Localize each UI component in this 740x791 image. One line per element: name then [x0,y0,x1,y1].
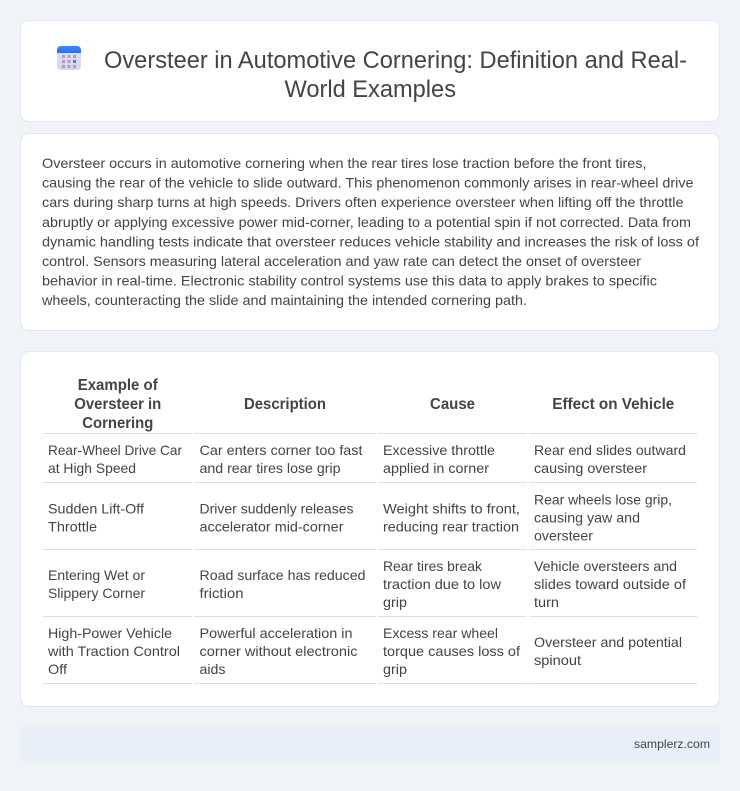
table row 4: with Traction Control [47,643,180,659]
table header row [74,377,674,432]
table row 1: Rear-Wheel Drive Car [48,442,182,458]
text block: oversteer explanation: control. Sensors measuring lateral acceleration and yaw rate can detect the onset of oversteer [42,253,641,269]
text block: oversteer explanation: behavior in real-time. Electronic stability control systems use this data to apply brakes to specific [42,273,657,289]
table row 3: turn [534,594,559,610]
column heading: example: Oversteer in [74,396,161,413]
table row 4: torque causes loss of [383,643,520,659]
table row 3: Road surface has reduced [200,567,366,583]
table row 2: accelerator mid-corner [200,518,344,534]
panel: intro description [20,134,720,330]
table row 3: grip [383,594,407,610]
table row 1: causing oversteer [534,460,647,476]
column heading: description: Description [244,396,326,413]
table row 3: traction due to low [383,576,502,592]
table row 3: Slippery Corner [48,585,145,601]
table row 1: Excessive throttle [383,442,495,458]
text block: oversteer explanation [41,155,699,308]
table row 2: Throttle [48,518,97,534]
text block: oversteer explanation: causing the rear of the vehicle to slide outward. This phenomenon commonly arises in rear-wheel drive [42,175,694,191]
table row 4: spinout [534,652,581,668]
title [104,47,687,103]
table row 4: Oversteer and potential [534,634,682,650]
column heading: effect: Effect on Vehicle [552,396,674,413]
text block: oversteer explanation: cars during sharp turns at high speeds. Drivers often experience oversteer when lifting off the throttle [42,194,684,210]
table row 3: slides toward outside of [534,576,686,592]
footer source text: samplerz.com [634,737,710,751]
table row 3: Rear tires break [383,558,483,574]
column heading: cause: Cause [430,396,475,413]
table row 4: aids [200,661,226,677]
table row 2: oversteer [534,528,593,544]
panel: examples table [20,352,720,706]
table row 2: causing yaw and [534,510,640,526]
text block: oversteer explanation: abruptly or applying excessive power mid-corner, leading to a potential spin if not corrected. Data from [42,214,691,230]
table row 1: Car enters corner too fast [200,442,363,458]
table row 2 [48,492,672,544]
table row 4: Off [48,661,67,677]
icon: calendar [57,46,81,70]
table row 1: applied in corner [383,460,489,476]
table row 3: Vehicle oversteers and [534,558,677,574]
table row 4: Powerful acceleration in [200,625,352,641]
table row 1 [48,442,686,476]
column heading: example: Example of [78,377,158,394]
panel: title card [20,20,720,122]
table row 2: Sudden Lift-Off [48,500,144,516]
title: World Examples [284,76,456,103]
table row 2: Weight shifts to front, [383,500,520,516]
table row 3 [48,558,686,610]
title: Oversteer in Automotive Cornering: Definition and Real- [104,47,687,74]
table row 2: reducing rear traction [383,518,519,534]
table row 1: Rear end slides outward [534,442,686,458]
table row 3: friction [200,585,244,601]
column heading: example [74,377,161,432]
table row 1: at High Speed [48,460,136,476]
table row 4: corner without electronic [200,643,358,659]
table row 4: Excess rear wheel [383,625,498,641]
table row 3: Entering Wet or [48,567,145,583]
text block: oversteer explanation: dynamic handling tests indicate that oversteer reduces vehicle stability and increases the risk of loss of [42,233,699,249]
table row 1: and rear tires lose grip [200,460,341,476]
text block: oversteer explanation: Oversteer occurs in automotive cornering when the rear tires lose traction before the front tires, [42,155,646,171]
table row 4: grip [383,661,407,677]
table row 2: Rear wheels lose grip, [534,492,672,508]
table row 2: Driver suddenly releases [200,500,354,516]
table row 4 [47,625,682,677]
text block: oversteer explanation: wheels, counteracting the slide and maintaining the intended cornering path. [41,292,527,308]
table row 4: High-Power Vehicle [48,625,172,641]
footer bar [20,727,720,761]
column heading: example: Cornering [82,415,153,432]
